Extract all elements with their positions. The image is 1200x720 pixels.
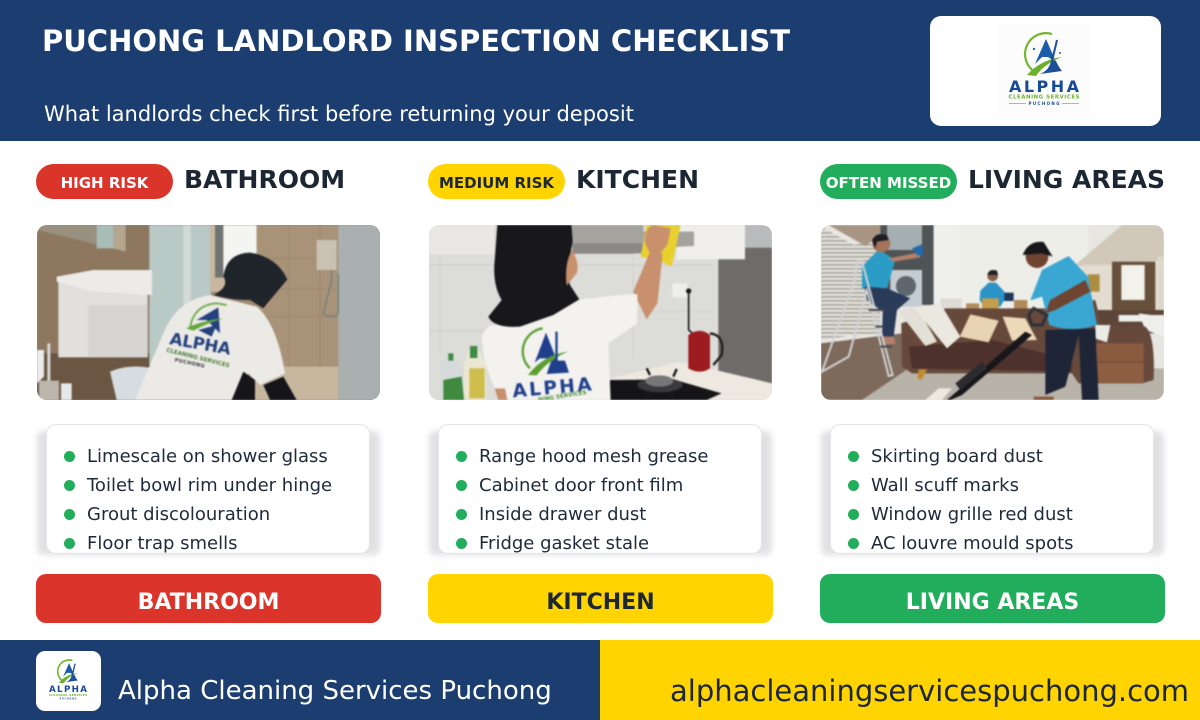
badge: high risk: HIGH RISK (61, 174, 148, 192)
card: kitchen checklist (438, 424, 762, 554)
button: kitchen (428, 574, 773, 623)
bullet (456, 508, 467, 520)
item: Cabinet door front film (479, 475, 683, 496)
item: Range hood mesh grease (479, 446, 708, 467)
item: Fridge gasket stale (479, 533, 649, 554)
icon: Alpha logo: ALPHA (1009, 77, 1080, 96)
bullet (64, 508, 75, 520)
heading: bathroom: BATHROOM (184, 165, 345, 194)
photo: living room cleaning (821, 225, 1164, 400)
item: Floor trap smells (87, 533, 238, 554)
bullet (64, 480, 75, 490)
footer: company name (0, 640, 600, 720)
badge: medium risk (428, 164, 565, 199)
icon: Alpha logo: CLEANING SERVICES (1008, 94, 1080, 100)
shadow: checklist card (37, 431, 380, 555)
header band (0, 0, 1200, 141)
badge: often missed (820, 164, 957, 199)
icon: Alpha logo small (48, 659, 87, 700)
item: Toilet bowl rim under hinge (87, 475, 332, 496)
item: Wall scuff marks (871, 475, 1019, 496)
bullet (848, 480, 859, 490)
heading: living areas: LIVING AREAS (968, 165, 1165, 194)
company name: Alpha Cleaning Services Puchong (118, 676, 552, 706)
badge: high risk (36, 164, 173, 199)
badge: often missed: OFTEN MISSED (826, 174, 951, 192)
footer logo (36, 651, 101, 711)
item: Inside drawer dust (479, 504, 646, 525)
item: Limescale on shower glass (87, 446, 328, 467)
item: Grout discolouration (87, 504, 270, 525)
icon: Alpha logo: PUCHONG (1028, 101, 1060, 106)
panel: living areas (820, 164, 1166, 623)
item: AC louvre mould spots (871, 533, 1074, 554)
panel: bathroom (36, 164, 382, 623)
card: living areas checklist (830, 424, 1154, 554)
button: bathroom: BATHROOM (138, 590, 279, 615)
bullet (456, 538, 467, 548)
shadow: checklist card (821, 431, 1164, 555)
item: Window grille red dust (871, 504, 1073, 525)
icon: Alpha logo small: CLEANING SERVICES (49, 693, 87, 697)
footer: website (600, 640, 1200, 720)
title: PUCHONG LANDLORD INSPECTION CHECKLIST (42, 24, 790, 58)
bullet (64, 450, 75, 462)
photo: bathroom cleaning: ALPHA (168, 329, 232, 359)
bullet (456, 480, 467, 490)
photo: bathroom cleaning: CLEANING SERVICES (166, 348, 230, 369)
photo: kitchen cleaning (429, 225, 772, 400)
icon: Alpha logo small: ALPHA (49, 685, 87, 695)
photo: bathroom cleaning (37, 225, 380, 400)
bullet (848, 450, 859, 462)
logo card (930, 16, 1161, 126)
button: living areas: LIVING AREAS (906, 590, 1079, 615)
badge: medium risk: MEDIUM RISK (439, 174, 554, 192)
bullet (848, 538, 859, 548)
shadow: checklist card (429, 431, 772, 555)
button: living areas (820, 574, 1165, 623)
item: Skirting board dust (871, 446, 1043, 467)
button: kitchen: KITCHEN (546, 590, 655, 615)
button: bathroom (36, 574, 381, 623)
bullet (64, 538, 75, 548)
icon: Alpha logo (1008, 32, 1080, 106)
website url: alphacleaningservicespuchong.com (670, 674, 1189, 708)
card: bathroom checklist (46, 424, 370, 554)
photo: bathroom cleaning: PUCHONG (174, 357, 205, 370)
panel: kitchen (428, 164, 774, 623)
bullet (456, 450, 467, 462)
bullet (848, 508, 859, 520)
heading: kitchen: KITCHEN (576, 165, 699, 194)
subtitle: What landlords check first before returning your deposit (44, 102, 634, 126)
icon: Alpha logo small: PUCHONG (60, 697, 77, 700)
